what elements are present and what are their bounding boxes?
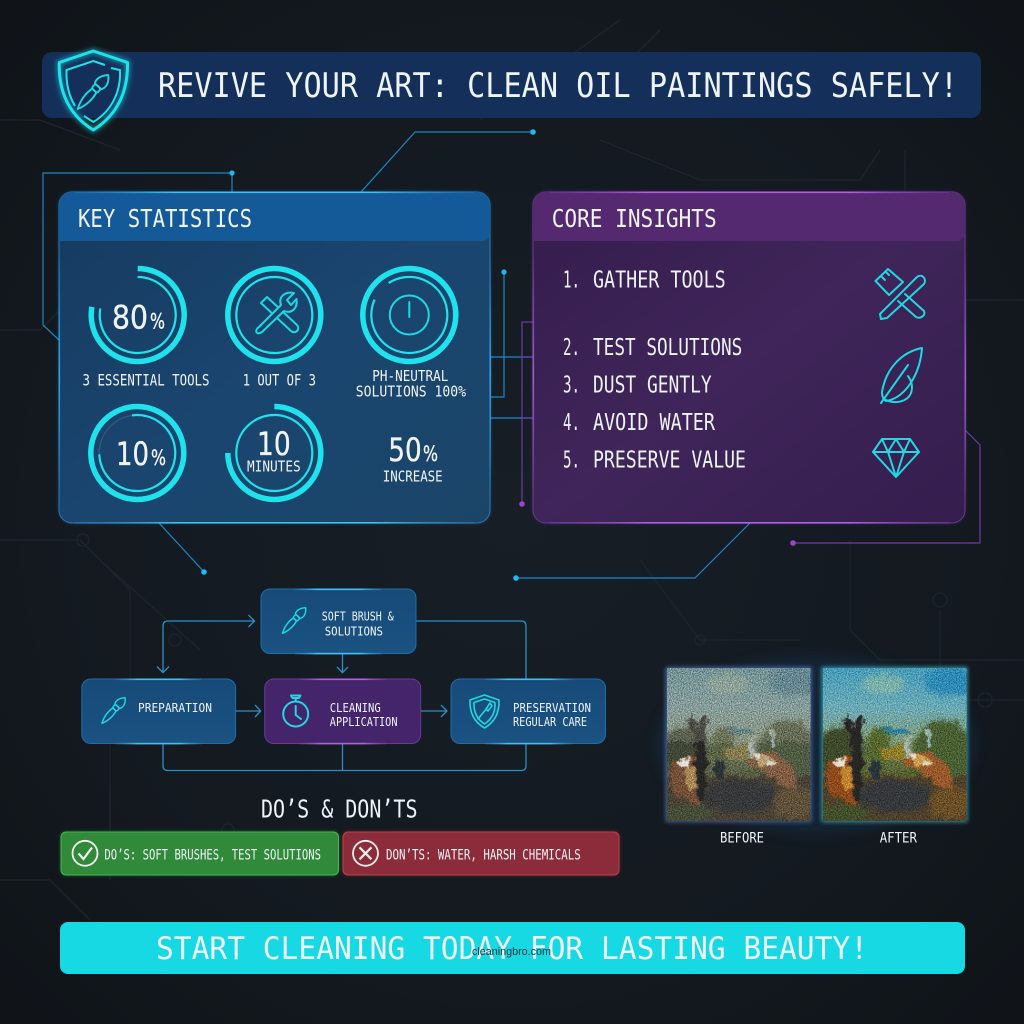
process flow diagram [82, 588, 606, 770]
flow box: cleaning application [265, 678, 421, 744]
icon: shield with brush [59, 51, 128, 130]
title banner [42, 51, 981, 130]
flow box: preservation: PRESERVATION [513, 700, 591, 715]
stat: 10 percent [91, 406, 184, 500]
panel: key statistics [58, 192, 491, 524]
green do's bar: DO’S: SOFT BRUSHES, TEST SOLUTIONS [104, 847, 321, 863]
stat: 80 percent: 80 [112, 298, 148, 336]
stat: 10 minutes: 10 [257, 425, 291, 463]
flow box: cleaning application: APPLICATION [330, 714, 398, 729]
numbered list: 5. [563, 448, 580, 474]
stat: ph-neutral gauge: PH-NEUTRAL [372, 367, 448, 385]
icon: diamond [873, 439, 919, 477]
icon: feather [881, 348, 922, 403]
flow box: preservation [451, 678, 606, 744]
stat: tools 1 out of 3: 1 OUT OF 3 [243, 370, 316, 390]
stat: ph-neutral gauge: SOLUTIONS 100% [356, 382, 466, 400]
circuit connector lines [43, 129, 980, 581]
red don'ts bar: DON’TS: WATER, HARSH CHEMICALS [386, 847, 581, 863]
call to action banner [60, 922, 965, 974]
flow box: soft brush and solutions [261, 588, 416, 654]
flow box: preservation: REGULAR CARE [513, 714, 587, 729]
do's and don'ts [61, 794, 619, 875]
stat: 10 minutes [228, 406, 321, 500]
numbered list: 2. [563, 335, 580, 361]
flow box: soft brush and solutions: SOLUTIONS [325, 623, 383, 638]
numbered list: 4. [563, 410, 580, 436]
flow box: preparation [82, 678, 236, 744]
stat: ph-neutral gauge [356, 268, 466, 400]
numbered list: PRESERVE VALUE [593, 448, 746, 474]
after painting: AFTER [880, 830, 917, 846]
flow box: cleaning application: CLEANING [330, 700, 381, 715]
before painting [662, 664, 814, 842]
after painting [818, 664, 970, 842]
flow box: soft brush and solutions: SOFT BRUSH & [322, 609, 394, 624]
stat: 80 percent: 3 ESSENTIAL TOOLS [82, 370, 210, 390]
stat: 80 percent: % [150, 310, 165, 334]
stat: 50 percent increase: INCREASE [383, 468, 443, 486]
flow box: preparation: PREPARATION [138, 700, 212, 715]
before painting: BEFORE [720, 830, 764, 846]
numbered list: 3. [563, 372, 580, 398]
before and after paintings [656, 655, 977, 846]
icon: crossed tools [876, 269, 925, 319]
numbered list [563, 267, 746, 474]
stat: 10 percent: 10 [116, 435, 149, 473]
red don'ts bar [343, 832, 619, 875]
panel heading: CORE INSIGHTS [552, 204, 717, 233]
watermark: cleaningbro.com [472, 946, 551, 958]
stat: 10 percent: % [151, 446, 166, 470]
stat: 50 percent increase: % [423, 442, 438, 466]
stat: 10 minutes: MINUTES [247, 458, 301, 476]
stat: 80 percent [82, 268, 210, 390]
numbered list: DUST GENTLY [593, 372, 712, 398]
green do's bar [61, 832, 338, 875]
stat: tools 1 out of 3 [228, 268, 321, 390]
call to action text: START CLEANING TODAY FOR LASTING BEAUTY! [156, 931, 868, 967]
panel heading: KEY STATISTICS [78, 204, 252, 233]
numbered list: GATHER TOOLS [593, 267, 726, 293]
numbered list: AVOID WATER [593, 410, 715, 436]
numbered list: TEST SOLUTIONS [593, 335, 742, 361]
numbered list: 1. [563, 267, 580, 293]
flow connectors [157, 615, 526, 770]
stat: 50 percent increase: 50 [388, 431, 422, 469]
panel: core insights [532, 192, 966, 524]
stat: 50 percent increase [383, 431, 443, 486]
section heading: DO’S & DON’TS [261, 794, 418, 823]
